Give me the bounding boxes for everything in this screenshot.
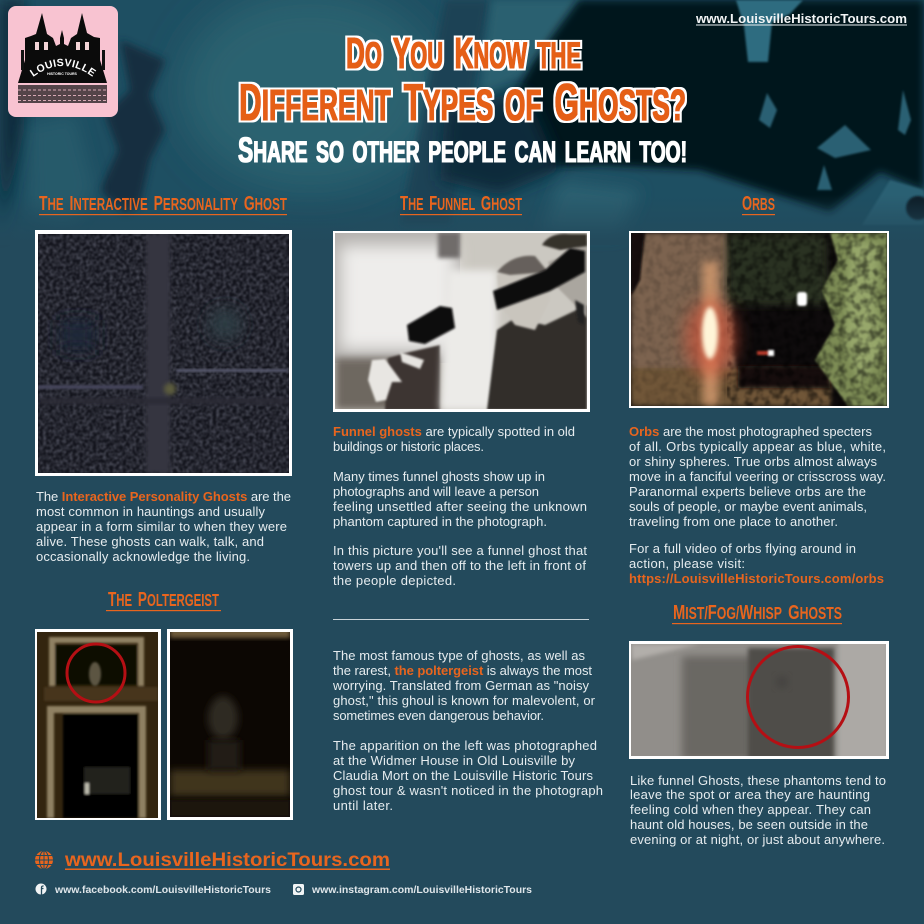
description: of all. Orbs typically appear as blue, white,: [629, 439, 886, 454]
website link top right: www.LouisvilleHistoricTours.com: [695, 12, 907, 26]
heading: THE FUNNEL GHOST: [400, 192, 522, 215]
description: https://LouisvilleHistoricTours.com/orbs: [629, 571, 884, 586]
description: Paranormal experts believe orbs are the: [629, 484, 866, 499]
icon: facebook: [36, 884, 46, 895]
text: poltergeist description: the rarest, the poltergeist is always the most: [333, 663, 592, 678]
description: Orbs are the most photographed specters: [629, 424, 872, 439]
heading: ORBS: [742, 192, 775, 215]
description: towers up and then off to the left in front of: [333, 558, 586, 573]
text: poltergeist description: at the Widmer House in Old Louisville by: [333, 753, 576, 768]
description: Many times funnel ghosts show up in: [333, 469, 545, 484]
text: poltergeist description: worrying. Translated from German as "noisy: [332, 678, 590, 693]
text: poltergeist description: The apparition on the left was photographed: [333, 738, 597, 753]
description: the people depicted.: [333, 573, 456, 588]
footer website: www.LouisvilleHistoricTours.com: [64, 849, 390, 871]
footer facebook: www.facebook.com/LouisvilleHistoricTours: [54, 884, 271, 896]
text: poltergeist description: [332, 648, 603, 813]
description: most common in hauntings and usually: [36, 504, 266, 519]
description: haunt old houses, be seen outside in the: [630, 817, 868, 832]
description: evening or at night, or just about anywhere.: [630, 832, 885, 847]
heading: THE POLTERGEIST: [108, 588, 219, 611]
logo: castle silhouette: LOUISVILLE: [30, 58, 96, 77]
photo: dark window: [35, 230, 292, 476]
logo badge: [8, 6, 118, 117]
panel: funnel ghost: [333, 192, 590, 588]
title: [238, 29, 687, 170]
description: souls of people, or maybe event animals,: [629, 499, 867, 514]
logo: castle silhouette: HISTORIC TOURS: [47, 72, 78, 76]
description: occasionally acknowledge the living.: [36, 549, 250, 564]
description: The Interactive Personality Ghosts are the: [36, 489, 291, 504]
photo: mist: [629, 640, 889, 760]
description: [630, 773, 886, 847]
text: poltergeist description: ghost," this ghoul is known for malevolent, or: [333, 693, 596, 708]
censor bars: [407, 306, 455, 344]
description: or shiny spheres. True orbs almost always: [629, 454, 878, 469]
heading: THE INTERACTIVE PERSONALITY GHOST: [39, 192, 287, 215]
text: poltergeist description: ghost tour & wasn't noticed in the photograph: [333, 783, 603, 798]
description: photographs and will leave a person: [333, 484, 539, 499]
description: [629, 424, 886, 586]
panel: interactive personality ghost: [35, 192, 292, 564]
photo: orb by tree: [629, 231, 889, 408]
panel: poltergeist: [35, 588, 293, 820]
text: poltergeist description: The most famous type of ghosts, as well as: [333, 648, 586, 663]
red circle: [748, 646, 848, 748]
photo: enlarged apparition: [167, 628, 293, 820]
description: [36, 489, 291, 564]
description: In this picture you'll see a funnel ghost that: [333, 543, 587, 558]
logo: castle silhouette: [18, 13, 107, 83]
description: feeling cold when they appear. They can: [630, 802, 871, 817]
divider: [333, 619, 589, 620]
description: appear in a form similar to when they were: [36, 519, 287, 534]
description: alive. These ghosts can walk, talk, and: [36, 534, 264, 549]
photo: funnel ghost: [333, 231, 590, 412]
description: For a full video of orbs flying around in: [629, 541, 856, 556]
description: Funnel ghosts are typically spotted in old: [333, 424, 575, 439]
description: [333, 424, 587, 588]
description: buildings or historic places.: [333, 439, 484, 454]
red circle: [67, 644, 125, 702]
footer instagram: www.instagram.com/LouisvilleHistoricTours: [311, 884, 532, 896]
text: poltergeist description: until later.: [333, 798, 393, 813]
title: DIFFERENT TYPES OF GHOSTS?: [239, 74, 686, 132]
panel: mist fog whisp ghosts: [629, 601, 889, 847]
logo: tagline band: [18, 85, 107, 103]
title: DO YOU KNOW THE: [346, 29, 581, 78]
photo: window with apparition: [35, 629, 161, 820]
title: SHARE SO OTHER PEOPLE CAN LEARN TOO!: [238, 131, 687, 170]
heading: MIST/FOG/WHISP GHOSTS: [673, 601, 842, 624]
panel: orbs: [629, 192, 889, 586]
description: feeling unsettled after seeing the unknown: [333, 499, 587, 514]
description: traveling from one place to another.: [629, 514, 838, 529]
description: phantom captured in the photograph.: [333, 514, 547, 529]
icon: instagram: [293, 884, 304, 895]
description: action, please visit:: [629, 556, 745, 571]
text: poltergeist description: sometimes even dangerous behavior.: [333, 708, 544, 723]
description: leave the spot or area they are haunting: [630, 787, 870, 802]
description: Like funnel Ghosts, these phantoms tend to: [630, 773, 886, 788]
text: poltergeist description: Claudia Mort on the Louisville Historic Tours: [333, 768, 594, 783]
icon: globe: [35, 851, 53, 869]
description: move in a fanciful veering or crisscross way.: [629, 469, 886, 484]
